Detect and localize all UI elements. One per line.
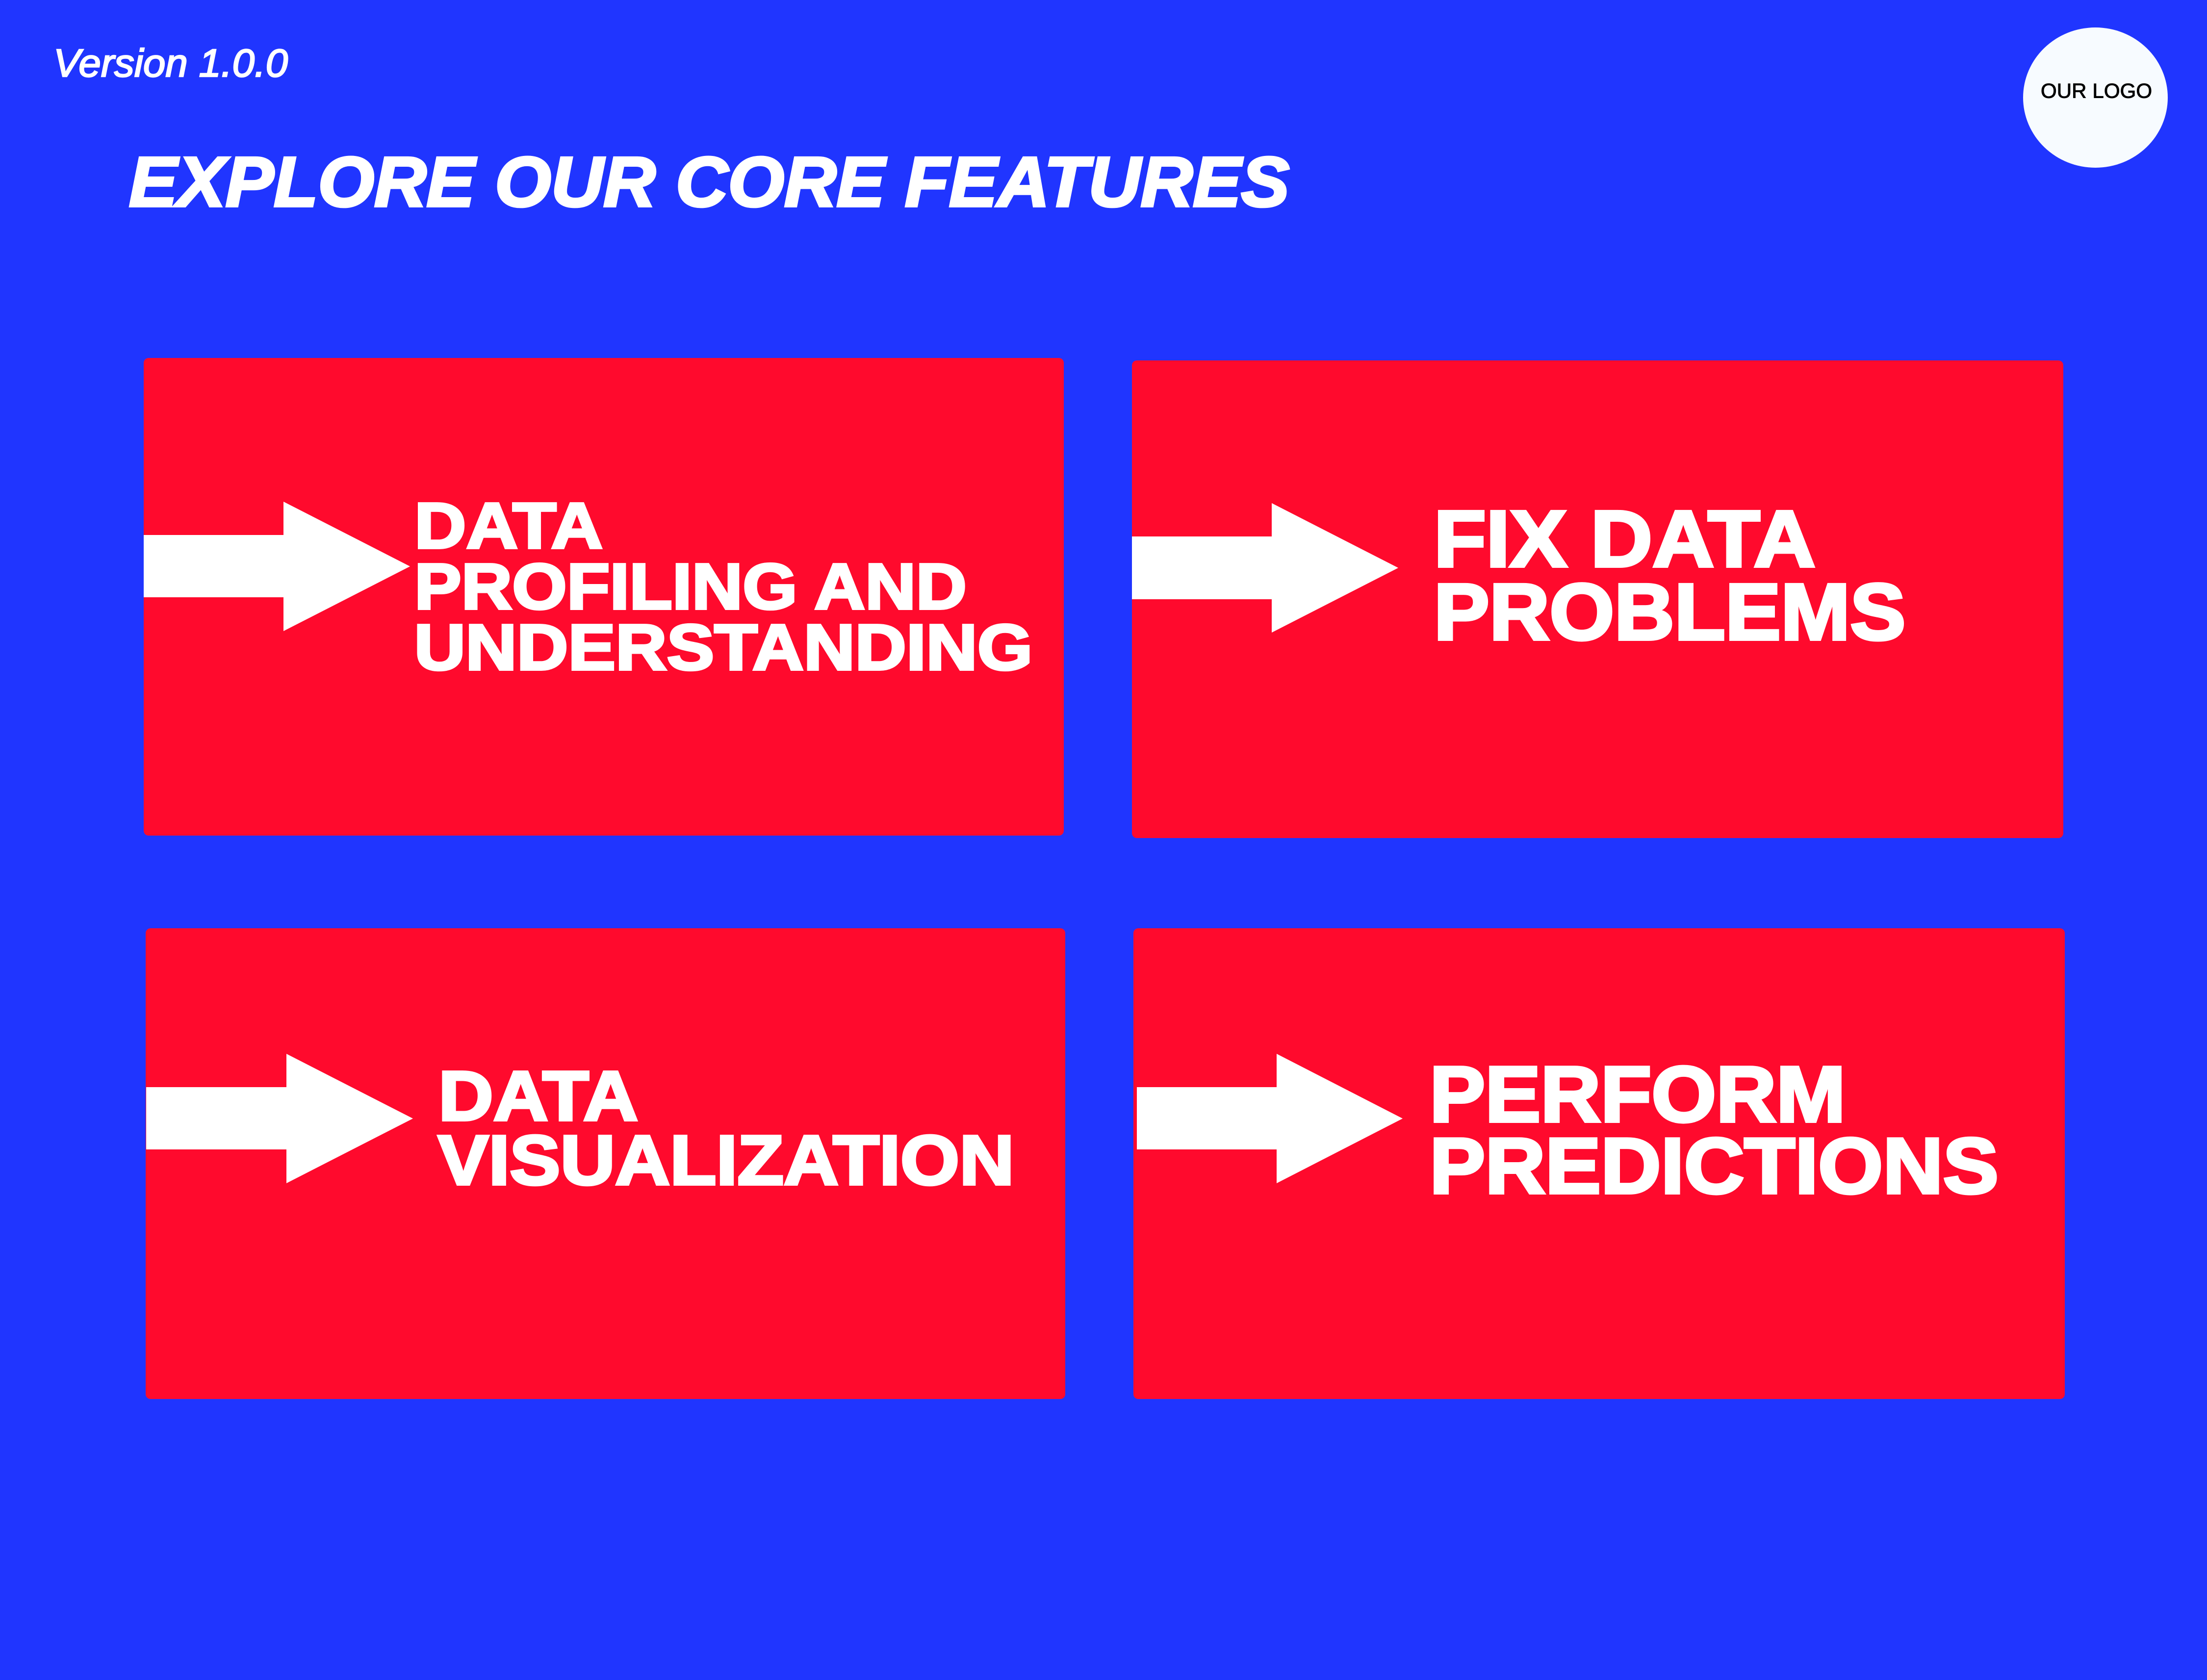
feature heading: PREDICTIONS — [1430, 1122, 1999, 1210]
card background — [1132, 360, 2063, 838]
feature heading: VISUALIZATION — [438, 1121, 1014, 1199]
logo circle — [2023, 27, 2168, 168]
icon: arrow — [144, 502, 410, 631]
card background — [144, 358, 1064, 836]
version label: Version 1.0.0 — [53, 41, 288, 85]
feature heading: DATA — [438, 1057, 638, 1135]
panel: data profiling and understanding — [144, 358, 1064, 836]
feature heading: PERFORM — [1430, 1050, 1846, 1139]
feature heading — [1434, 494, 1906, 657]
card background — [146, 928, 1065, 1399]
icon: arrow — [1132, 503, 1398, 633]
card background — [1133, 928, 2065, 1399]
logo text: OUR LOGO — [2041, 79, 2152, 102]
feature heading: PROBLEMS — [1434, 567, 1906, 657]
feature heading — [1430, 1050, 1999, 1210]
feature heading — [414, 489, 1033, 684]
logo badge — [2023, 27, 2168, 168]
feature heading: DATA — [414, 489, 603, 562]
feature heading — [438, 1057, 1014, 1199]
feature heading: PROFILING AND — [414, 550, 967, 623]
feature heading: UNDERSTANDING — [414, 611, 1033, 684]
icon: arrow — [146, 1054, 413, 1183]
panel: perform predictions — [1133, 928, 2065, 1399]
panel: data visualization — [146, 928, 1065, 1399]
title: EXPLORE OUR CORE FEATURES — [129, 142, 1289, 222]
panel: fix data problems — [1132, 360, 2063, 838]
icon: arrow — [1137, 1054, 1403, 1183]
feature heading: FIX DATA — [1434, 494, 1816, 584]
